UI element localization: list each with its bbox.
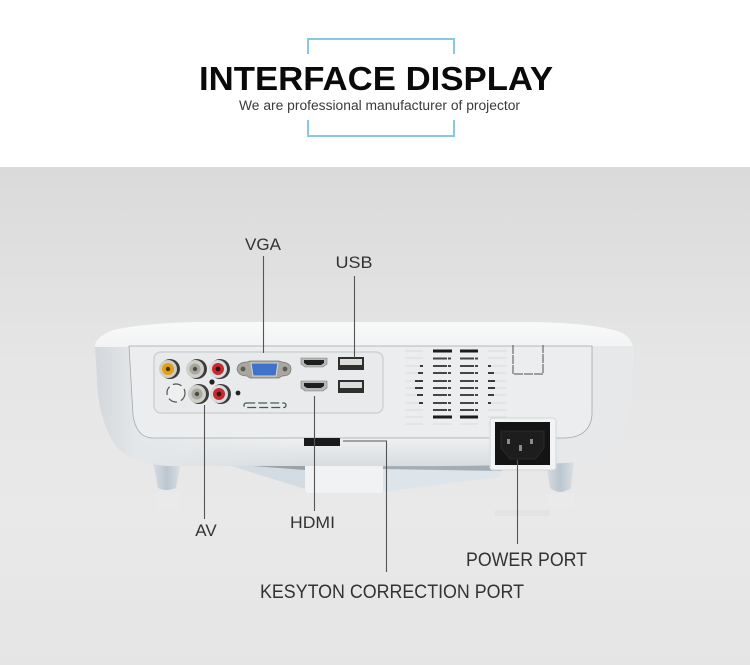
S-video port [167,384,185,402]
HDMI ports [301,358,327,391]
subtitle: We are professional manufacturer of projector [239,98,521,113]
VGA port [237,361,291,378]
base stand shadow wedges [225,464,305,489]
callout: HDMI: HDMI [290,513,335,532]
callout: USB: USB [336,253,372,272]
lens flap outline [513,345,543,374]
indicator dots [209,379,240,395]
power socket [490,418,556,470]
callout: AV [195,405,217,540]
grey photo background [0,167,750,665]
callout: power port [466,460,587,571]
back panel [129,346,592,438]
yellow RCA port [160,359,180,379]
white RCA port bottom [189,384,209,404]
callout: VGA: VGA [245,235,282,254]
callout: AV: AV [195,521,217,540]
heading block [199,39,553,136]
title bracket top [308,39,454,54]
dark vent slots outer [415,366,495,403]
callout: VGA [245,235,282,353]
USB port top [338,357,364,370]
AV ports [159,359,240,404]
HDMI port bottom [301,381,327,391]
ventilation grille [405,351,507,424]
white header background [0,0,750,167]
projector [95,322,633,516]
green connector strip [244,403,286,408]
right foot [546,462,574,492]
right body side [556,346,633,463]
keystone slider [304,438,340,446]
callout: keystone correction port [260,441,524,603]
title: INTERFACE DISPLAY [199,61,553,98]
callout: USB [336,253,372,358]
white RCA port top [187,359,207,379]
callout: keystone correction port: KESYTON CORRECTION PORT [260,582,524,603]
dark vent slots top and bottom rows [433,351,478,417]
title bracket bottom [308,120,454,136]
dark vent slots inner [433,358,478,410]
USB port bottom [338,380,364,393]
callout: HDMI [290,396,335,532]
callout: power port: POWER PORT [466,550,587,571]
left foot [153,462,181,490]
port panel [154,352,383,413]
projector body [95,322,633,466]
floor reflections [156,492,574,516]
base stand [305,466,383,493]
USB ports [338,357,364,393]
outer vent columns [405,351,507,424]
HDMI port top [301,358,327,367]
red RCA port bottom [211,384,231,404]
red RCA port top [210,359,230,379]
left body side [95,347,300,466]
